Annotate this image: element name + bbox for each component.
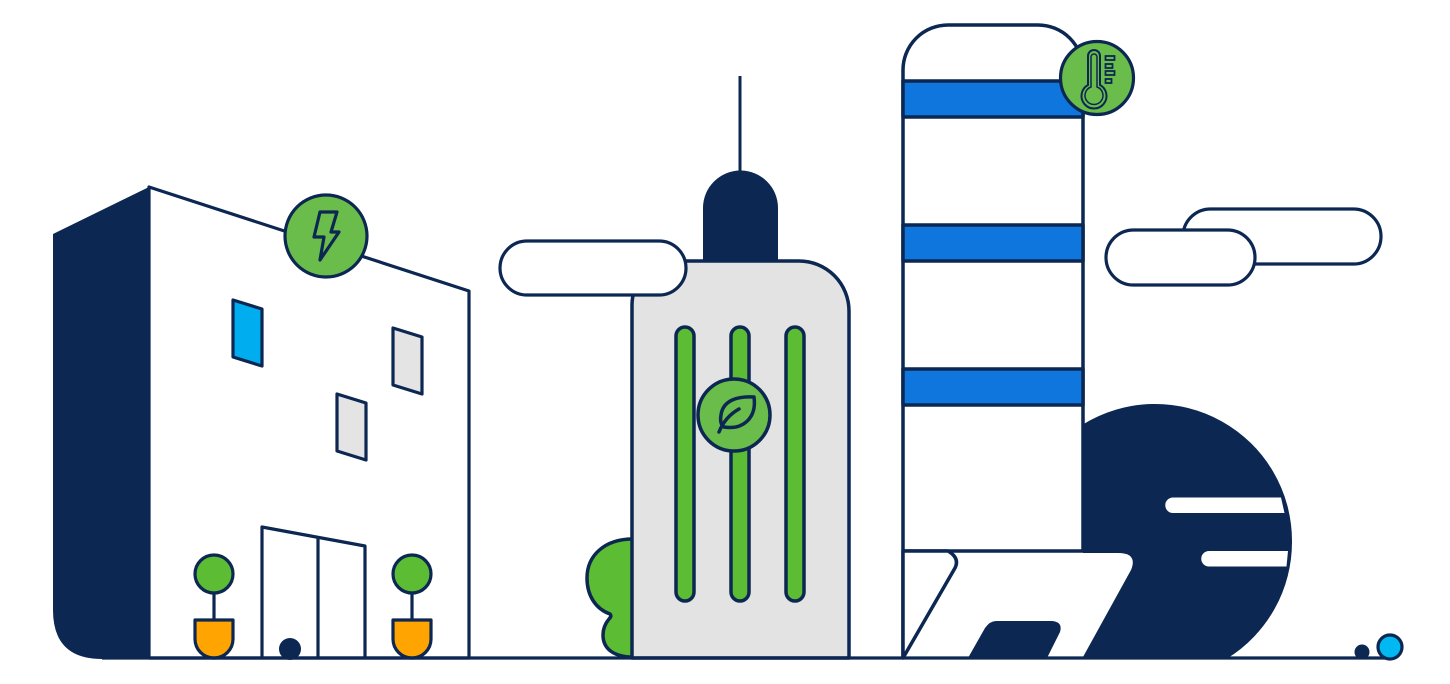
tall tower [903,25,1083,658]
antenna [738,76,742,172]
left building [53,187,469,660]
grey tower body [632,261,849,658]
blue band bottom [903,369,1083,405]
icon: lightning badge [285,195,367,277]
cloud left [500,241,686,295]
grey window right [393,328,422,394]
blue dot [1378,635,1402,659]
right complex [903,25,1292,659]
icon: thermometer badge [1060,42,1134,114]
blue window [233,300,262,366]
building white facade [149,187,469,658]
grey window centre [337,394,366,460]
green bar left [676,327,694,601]
white base shape [910,553,1133,657]
dark sphere [1083,404,1292,659]
blue band top [903,81,1083,117]
front cloud [1106,230,1255,285]
sphere white stripes [1165,498,1288,566]
bush [587,539,633,657]
base dark block [968,621,1061,658]
dome [703,170,778,263]
icon: leaf badge [698,379,770,451]
ground line [102,656,1390,660]
green bar right [786,327,804,601]
blue band middle [903,225,1083,261]
green bar centre [731,327,749,601]
base outline [903,551,956,658]
clouds right [1106,209,1381,285]
left potted tree [195,555,233,658]
building dark side wall [53,187,149,659]
door ball [279,638,301,660]
dark dot [1354,644,1370,660]
middle building [500,76,849,658]
back cloud [1183,209,1381,264]
right potted tree [393,555,431,658]
double door [262,527,365,658]
